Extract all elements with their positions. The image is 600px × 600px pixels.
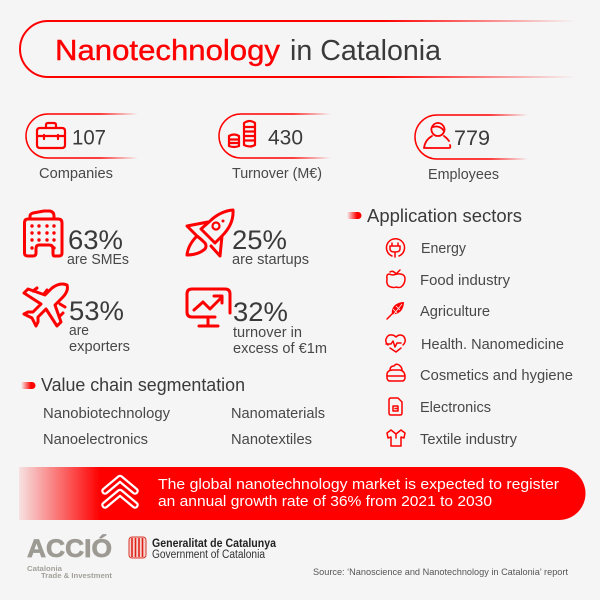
stat: startups <box>187 210 309 268</box>
logo: Generalitat de Catalunya <box>129 537 277 561</box>
sector: cosmetics: Cosmetics and hygiene <box>420 368 573 384</box>
sector: electronics: Electronics <box>420 400 491 416</box>
label: Turnover (M€) <box>232 166 322 182</box>
label: are <box>69 323 89 339</box>
stat: exporters <box>24 284 130 355</box>
title text: Nanotechnology <box>55 35 281 67</box>
label: Companies <box>39 166 113 182</box>
item: Nanoelectronics <box>43 432 148 448</box>
label: turnover in <box>233 325 302 341</box>
pill outline <box>415 115 528 159</box>
icon: person <box>424 123 450 148</box>
pill outline <box>26 114 138 158</box>
icon: rocket <box>187 210 233 256</box>
icon: airplane <box>24 284 67 326</box>
sector: textile: Textile industry <box>420 432 518 448</box>
section marker <box>21 382 36 389</box>
logo: ACCIÓ: ACCIÓ <box>27 533 112 563</box>
callout text: an annual growth rate of 36% from 2021 to 2030 <box>158 493 492 510</box>
sector: health: Health. Nanomedicine <box>421 337 564 353</box>
stat: turnover <box>219 114 331 182</box>
label: excess of €1m <box>233 341 327 357</box>
value: 779 <box>454 127 490 150</box>
value: 430 <box>268 126 303 150</box>
stat: employees <box>415 115 528 183</box>
pill outline <box>219 114 331 158</box>
logo: ACCIÓ <box>27 533 113 580</box>
label: are startups <box>232 252 309 268</box>
value: 107 <box>72 126 106 150</box>
logo: Generalitat de Catalunya: Government of Catalonia <box>152 549 266 561</box>
sector: food industry: Food industry <box>420 273 511 289</box>
icon: coin stacks <box>229 121 255 147</box>
title text: in Catalonia <box>290 35 441 67</box>
icon: wheat <box>387 302 404 319</box>
banner background <box>19 467 586 520</box>
label: are SMEs <box>67 252 129 268</box>
icon: monitor with rising chart <box>187 289 230 326</box>
logo: ACCIÓ: Catalonia <box>27 564 63 573</box>
value: 32% <box>233 297 288 327</box>
stat: turnover over 1m <box>187 289 327 357</box>
icon: apple <box>387 270 405 288</box>
icon: heart with pulse <box>386 335 405 352</box>
value: 53% <box>69 296 124 326</box>
flag emblem <box>129 537 146 558</box>
icon: electronics chip <box>389 398 402 415</box>
callout text: The global nanotechnology market is expected to register <box>158 476 559 493</box>
icon: t-shirt <box>387 430 405 446</box>
label: exporters <box>69 339 130 355</box>
heading: Application sectors <box>367 206 522 226</box>
callout banner <box>19 467 586 520</box>
item: Nanomaterials <box>231 406 325 422</box>
icon: cosmetics jar <box>387 364 405 381</box>
value: 25% <box>232 225 287 255</box>
panel: value chain segmentation <box>21 375 325 448</box>
panel: application sectors <box>347 206 573 448</box>
stat: SMEs <box>24 211 129 268</box>
value: 63% <box>68 225 123 255</box>
icon: briefcase <box>37 123 65 148</box>
logo: Generalitat de Catalunya: Generalitat de Catalunya <box>152 538 277 550</box>
section marker <box>347 212 362 219</box>
label: Employees <box>428 167 499 183</box>
heading: Value chain segmentation <box>41 375 245 395</box>
source note: Source: ‘Nanoscience and Nanotechnology in Catalonia’ report <box>313 567 568 578</box>
icon: building <box>24 211 62 256</box>
icon: double chevron up <box>105 478 135 505</box>
sector: energy: Energy <box>421 241 467 257</box>
title outline pill <box>20 21 575 77</box>
item: Nanobiotechnology <box>43 406 171 422</box>
icon: energy plug <box>386 239 404 257</box>
logo: ACCIÓ: Trade & Investment <box>41 571 113 580</box>
item: Nanotextiles <box>231 432 312 448</box>
sector: agriculture: Agriculture <box>420 304 490 320</box>
title banner <box>20 21 575 77</box>
stat: companies <box>26 114 138 182</box>
